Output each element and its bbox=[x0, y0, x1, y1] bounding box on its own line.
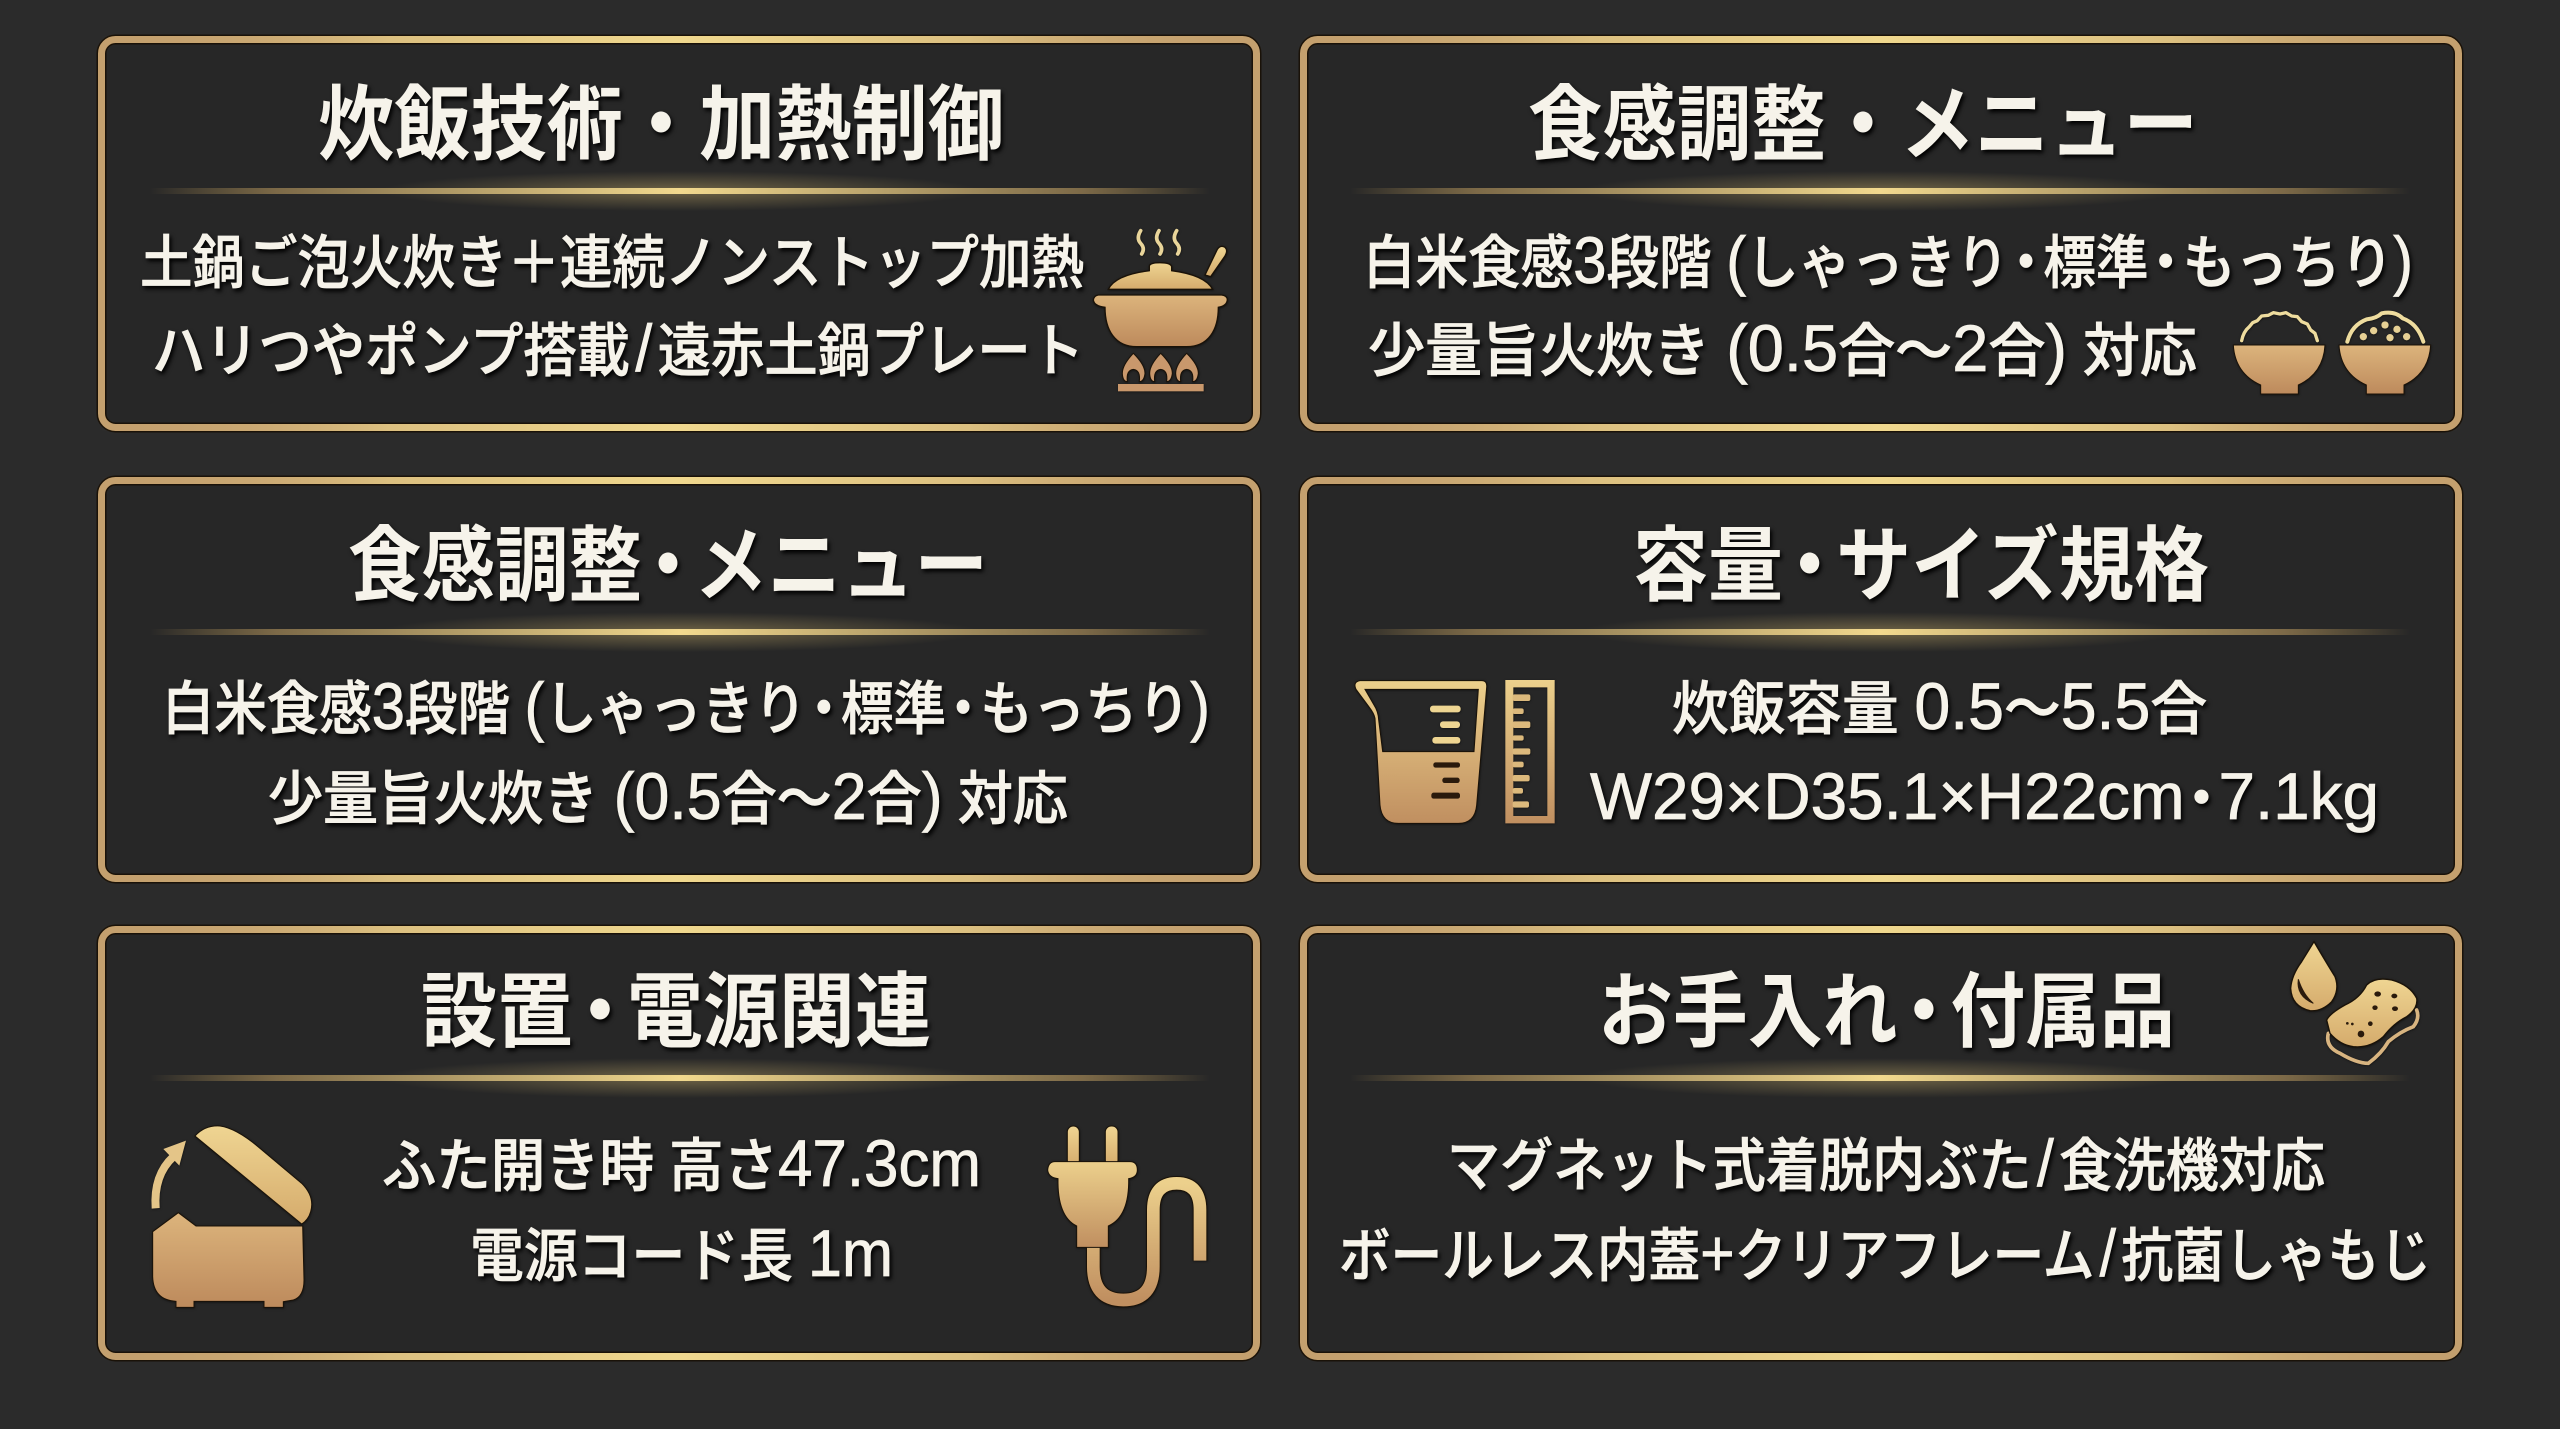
body text: ボールレス内蓋+クリアフレーム/抗菌しゃもじ bbox=[1339, 1216, 2431, 1290]
panel: 食感調整・メニュー (左中) bbox=[101, 477, 1256, 882]
panel frame bbox=[1303, 926, 2458, 1360]
panel frame bbox=[1303, 477, 2458, 882]
icon: pot on flame bbox=[1093, 231, 1227, 391]
body text: ふた開き時 高さ47.3cm bbox=[382, 1126, 981, 1200]
divider bbox=[1350, 171, 2410, 211]
heading: お手入れ・付属品 bbox=[1598, 967, 2175, 1058]
panel frame bbox=[101, 477, 1256, 882]
panel frame bbox=[101, 926, 1256, 1360]
body text: 白米食感3段階 (しゃっきり・標準・もっちり) bbox=[162, 669, 1210, 743]
body text bbox=[1339, 1126, 2431, 1290]
heading: 食感調整・メニュー bbox=[1528, 80, 2198, 171]
body text: W29×D35.1×H22cm・7.1kg bbox=[1590, 759, 2379, 833]
body text: 白米食感3段階 (しゃっきり・標準・もっちり) bbox=[1363, 223, 2413, 297]
heading: 設置・電源関連 bbox=[421, 967, 931, 1058]
body text: 少量旨火炊き (0.5合～2合) 対応 bbox=[268, 759, 1068, 833]
panel: 設置・電源関連 bbox=[101, 926, 1256, 1360]
body text: ハリつやポンプ搭載/遠赤土鍋プレート bbox=[152, 311, 1084, 385]
panel: お手入れ・付属品 bbox=[1303, 926, 2458, 1360]
heading: 容量・サイズ規格 bbox=[1633, 521, 2209, 612]
panel frame bbox=[101, 36, 1256, 431]
heading: 食感調整・メニュー bbox=[348, 521, 988, 612]
body text: 炊飯容量 0.5～5.5合 bbox=[1672, 669, 2207, 743]
divider bbox=[150, 1058, 1210, 1098]
icon: measuring cup and ruler bbox=[1355, 680, 1555, 823]
body text bbox=[1363, 223, 2413, 385]
icon: open lid rice cooker bbox=[153, 1126, 312, 1307]
body text bbox=[1590, 669, 2379, 833]
body text: マグネット式着脱内ぶた/食洗機対応 bbox=[1447, 1126, 2325, 1200]
heading: 炊飯技術・加熱制御 bbox=[318, 80, 1004, 171]
divider bbox=[1350, 612, 2410, 652]
divider bbox=[1350, 1058, 2410, 1098]
icon: water drop and sponge bbox=[2291, 942, 2418, 1063]
body text bbox=[162, 669, 1210, 833]
panel: 容量・サイズ規格 bbox=[1303, 477, 2458, 882]
body text bbox=[140, 231, 1084, 385]
body text: 土鍋ご泡火炊き＋連続ノンストップ加熱 bbox=[140, 231, 1084, 296]
panel: 食感調整・メニュー (右上) bbox=[1303, 36, 2458, 431]
icon: power plug bbox=[1048, 1126, 1200, 1300]
body text bbox=[382, 1126, 981, 1290]
divider bbox=[150, 612, 1210, 652]
divider bbox=[150, 171, 1210, 211]
icon: rice bowls bbox=[2233, 313, 2431, 394]
panel frame bbox=[1303, 36, 2458, 431]
body text: 電源コード長 1m bbox=[470, 1216, 893, 1290]
panel: 炊飯技術・加熱制御 bbox=[101, 36, 1256, 431]
body text: 少量旨火炊き (0.5合～2合) 対応 bbox=[1368, 311, 2197, 385]
